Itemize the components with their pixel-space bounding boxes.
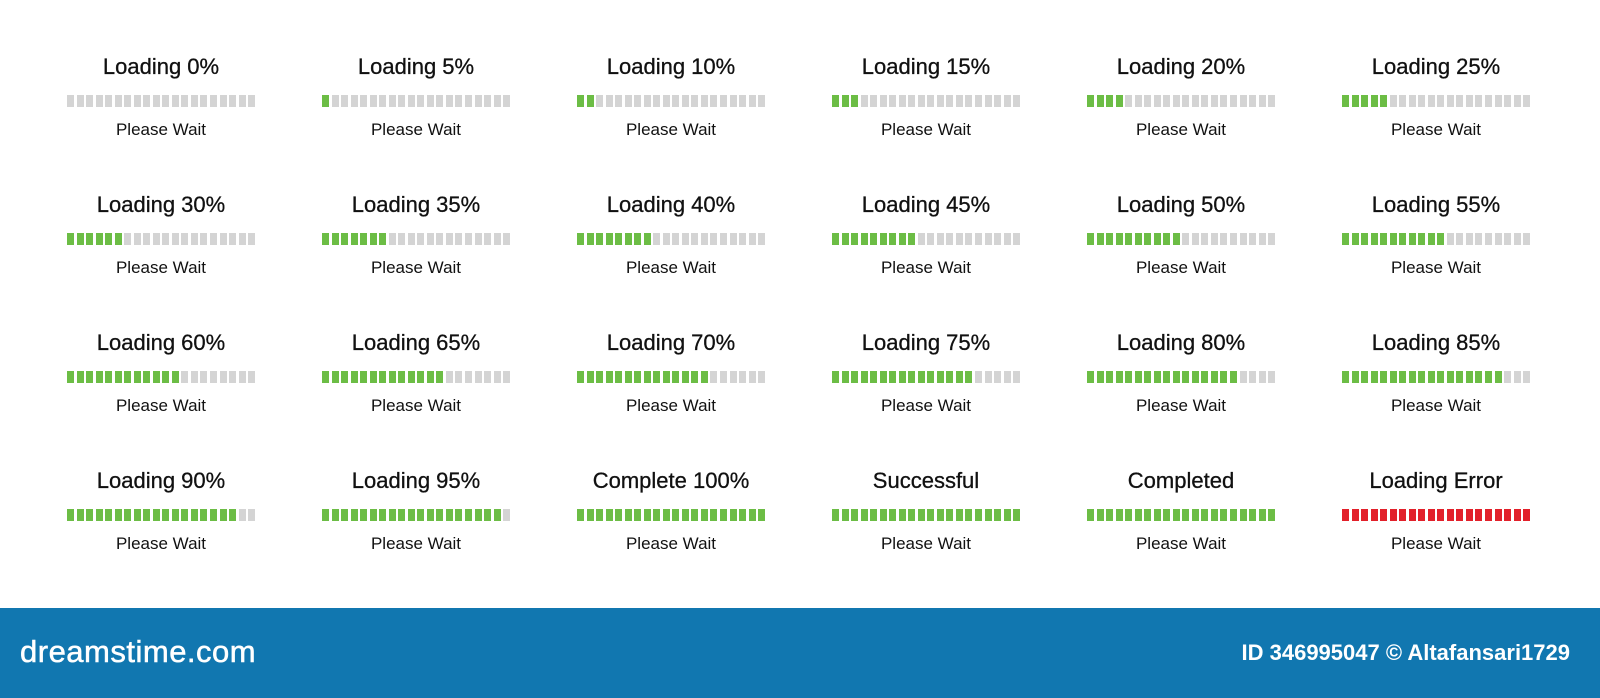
item: Loading 20%: Please Wait bbox=[1136, 120, 1226, 139]
item: Loading 40%: Please Wait bbox=[626, 258, 716, 277]
row 2 bbox=[67, 192, 1530, 277]
item: Loading 5%: Please Wait bbox=[371, 120, 461, 139]
item: Loading 60% bbox=[67, 330, 255, 415]
item: Loading 75% bbox=[832, 330, 1020, 415]
item: Completed: Please Wait bbox=[1136, 534, 1226, 553]
item: Loading 45%: Loading 45% bbox=[862, 192, 990, 217]
item: Loading 90%: Loading 90% bbox=[97, 468, 225, 493]
item: Loading 45% bbox=[832, 192, 1020, 277]
item: Loading 80%: Loading 80% bbox=[1117, 330, 1245, 355]
item: Loading 0%: Loading 0% bbox=[103, 54, 219, 79]
item: Loading 10%: Please Wait bbox=[626, 120, 716, 139]
item: Loading 95% bbox=[322, 468, 510, 553]
item: Loading 0% bbox=[67, 54, 255, 139]
item: Completed bbox=[1087, 468, 1275, 553]
item: Loading 55%: Please Wait bbox=[1391, 258, 1481, 277]
item: Loading 20% bbox=[1087, 54, 1275, 139]
item: Loading 70% bbox=[577, 330, 765, 415]
item: Loading 35%: Please Wait bbox=[371, 258, 461, 277]
row 1 bbox=[67, 54, 1530, 139]
item: Loading Error bbox=[1342, 468, 1530, 553]
item: Loading 30% bbox=[67, 192, 255, 277]
item: Loading 25%: Please Wait bbox=[1391, 120, 1481, 139]
item: Loading 65%: Loading 65% bbox=[352, 330, 480, 355]
item: Loading 5%: Loading 5% bbox=[358, 54, 474, 79]
item: Loading 85%: Please Wait bbox=[1391, 396, 1481, 415]
item: Loading 25%: Loading 25% bbox=[1372, 54, 1500, 79]
item: Successful bbox=[832, 468, 1020, 553]
row 3 bbox=[67, 330, 1530, 415]
item: Loading 75%: Loading 75% bbox=[862, 330, 990, 355]
item: Loading 90%: Please Wait bbox=[116, 534, 206, 553]
item: Loading 90% bbox=[67, 468, 255, 553]
item: Loading 15% bbox=[832, 54, 1020, 139]
item: Loading 70%: Please Wait bbox=[626, 396, 716, 415]
row 4 bbox=[67, 468, 1530, 553]
item: Loading 50% bbox=[1087, 192, 1275, 277]
item: Loading 45%: Please Wait bbox=[881, 258, 971, 277]
item: Complete 100%: Complete 100% bbox=[593, 468, 749, 493]
item: Loading 65% bbox=[322, 330, 510, 415]
item: Loading 10% bbox=[577, 54, 765, 139]
item: Loading 10%: Loading 10% bbox=[607, 54, 735, 79]
item: Loading 30%: Please Wait bbox=[116, 258, 206, 277]
item: Loading 5% bbox=[322, 54, 510, 139]
item: Loading 85% bbox=[1342, 330, 1530, 415]
item: Loading 35%: Loading 35% bbox=[352, 192, 480, 217]
item: Loading 40% bbox=[577, 192, 765, 277]
item: Loading 65%: Please Wait bbox=[371, 396, 461, 415]
item: Loading 75%: Please Wait bbox=[881, 396, 971, 415]
item: Loading 85%: Loading 85% bbox=[1372, 330, 1500, 355]
image id and credit: ID 346995047 © Altafansari1729 bbox=[1242, 640, 1570, 665]
item: Loading 95%: Please Wait bbox=[371, 534, 461, 553]
item: Successful: Please Wait bbox=[881, 534, 971, 553]
item: Loading 55% bbox=[1342, 192, 1530, 277]
item: Complete 100% bbox=[577, 468, 765, 553]
item: Loading 80% bbox=[1087, 330, 1275, 415]
item: Loading Error: Please Wait bbox=[1391, 534, 1481, 553]
item: Complete 100%: Please Wait bbox=[626, 534, 716, 553]
logo text: dreamstime.com bbox=[20, 634, 256, 669]
item: Completed: Completed bbox=[1128, 468, 1234, 493]
item: Loading 50%: Please Wait bbox=[1136, 258, 1226, 277]
item: Loading 70%: Loading 70% bbox=[607, 330, 735, 355]
item: Loading 50%: Loading 50% bbox=[1117, 192, 1245, 217]
item: Loading 55%: Loading 55% bbox=[1372, 192, 1500, 217]
item: Loading 15%: Loading 15% bbox=[862, 54, 990, 79]
item: Loading 95%: Loading 95% bbox=[352, 468, 480, 493]
item: Loading 25% bbox=[1342, 54, 1530, 139]
item: Loading 15%: Please Wait bbox=[881, 120, 971, 139]
item: Loading 20%: Loading 20% bbox=[1117, 54, 1245, 79]
item: Successful: Successful bbox=[873, 468, 979, 493]
item: Loading 30%: Loading 30% bbox=[97, 192, 225, 217]
item: Loading 0%: Please Wait bbox=[116, 120, 206, 139]
item: Loading 40%: Loading 40% bbox=[607, 192, 735, 217]
item: Loading Error: Loading Error bbox=[1369, 468, 1503, 493]
item: Loading 60%: Please Wait bbox=[116, 396, 206, 415]
footer band bbox=[0, 608, 1600, 698]
item: Loading 35% bbox=[322, 192, 510, 277]
item: Loading 80%: Please Wait bbox=[1136, 396, 1226, 415]
item: Loading 60%: Loading 60% bbox=[97, 330, 225, 355]
